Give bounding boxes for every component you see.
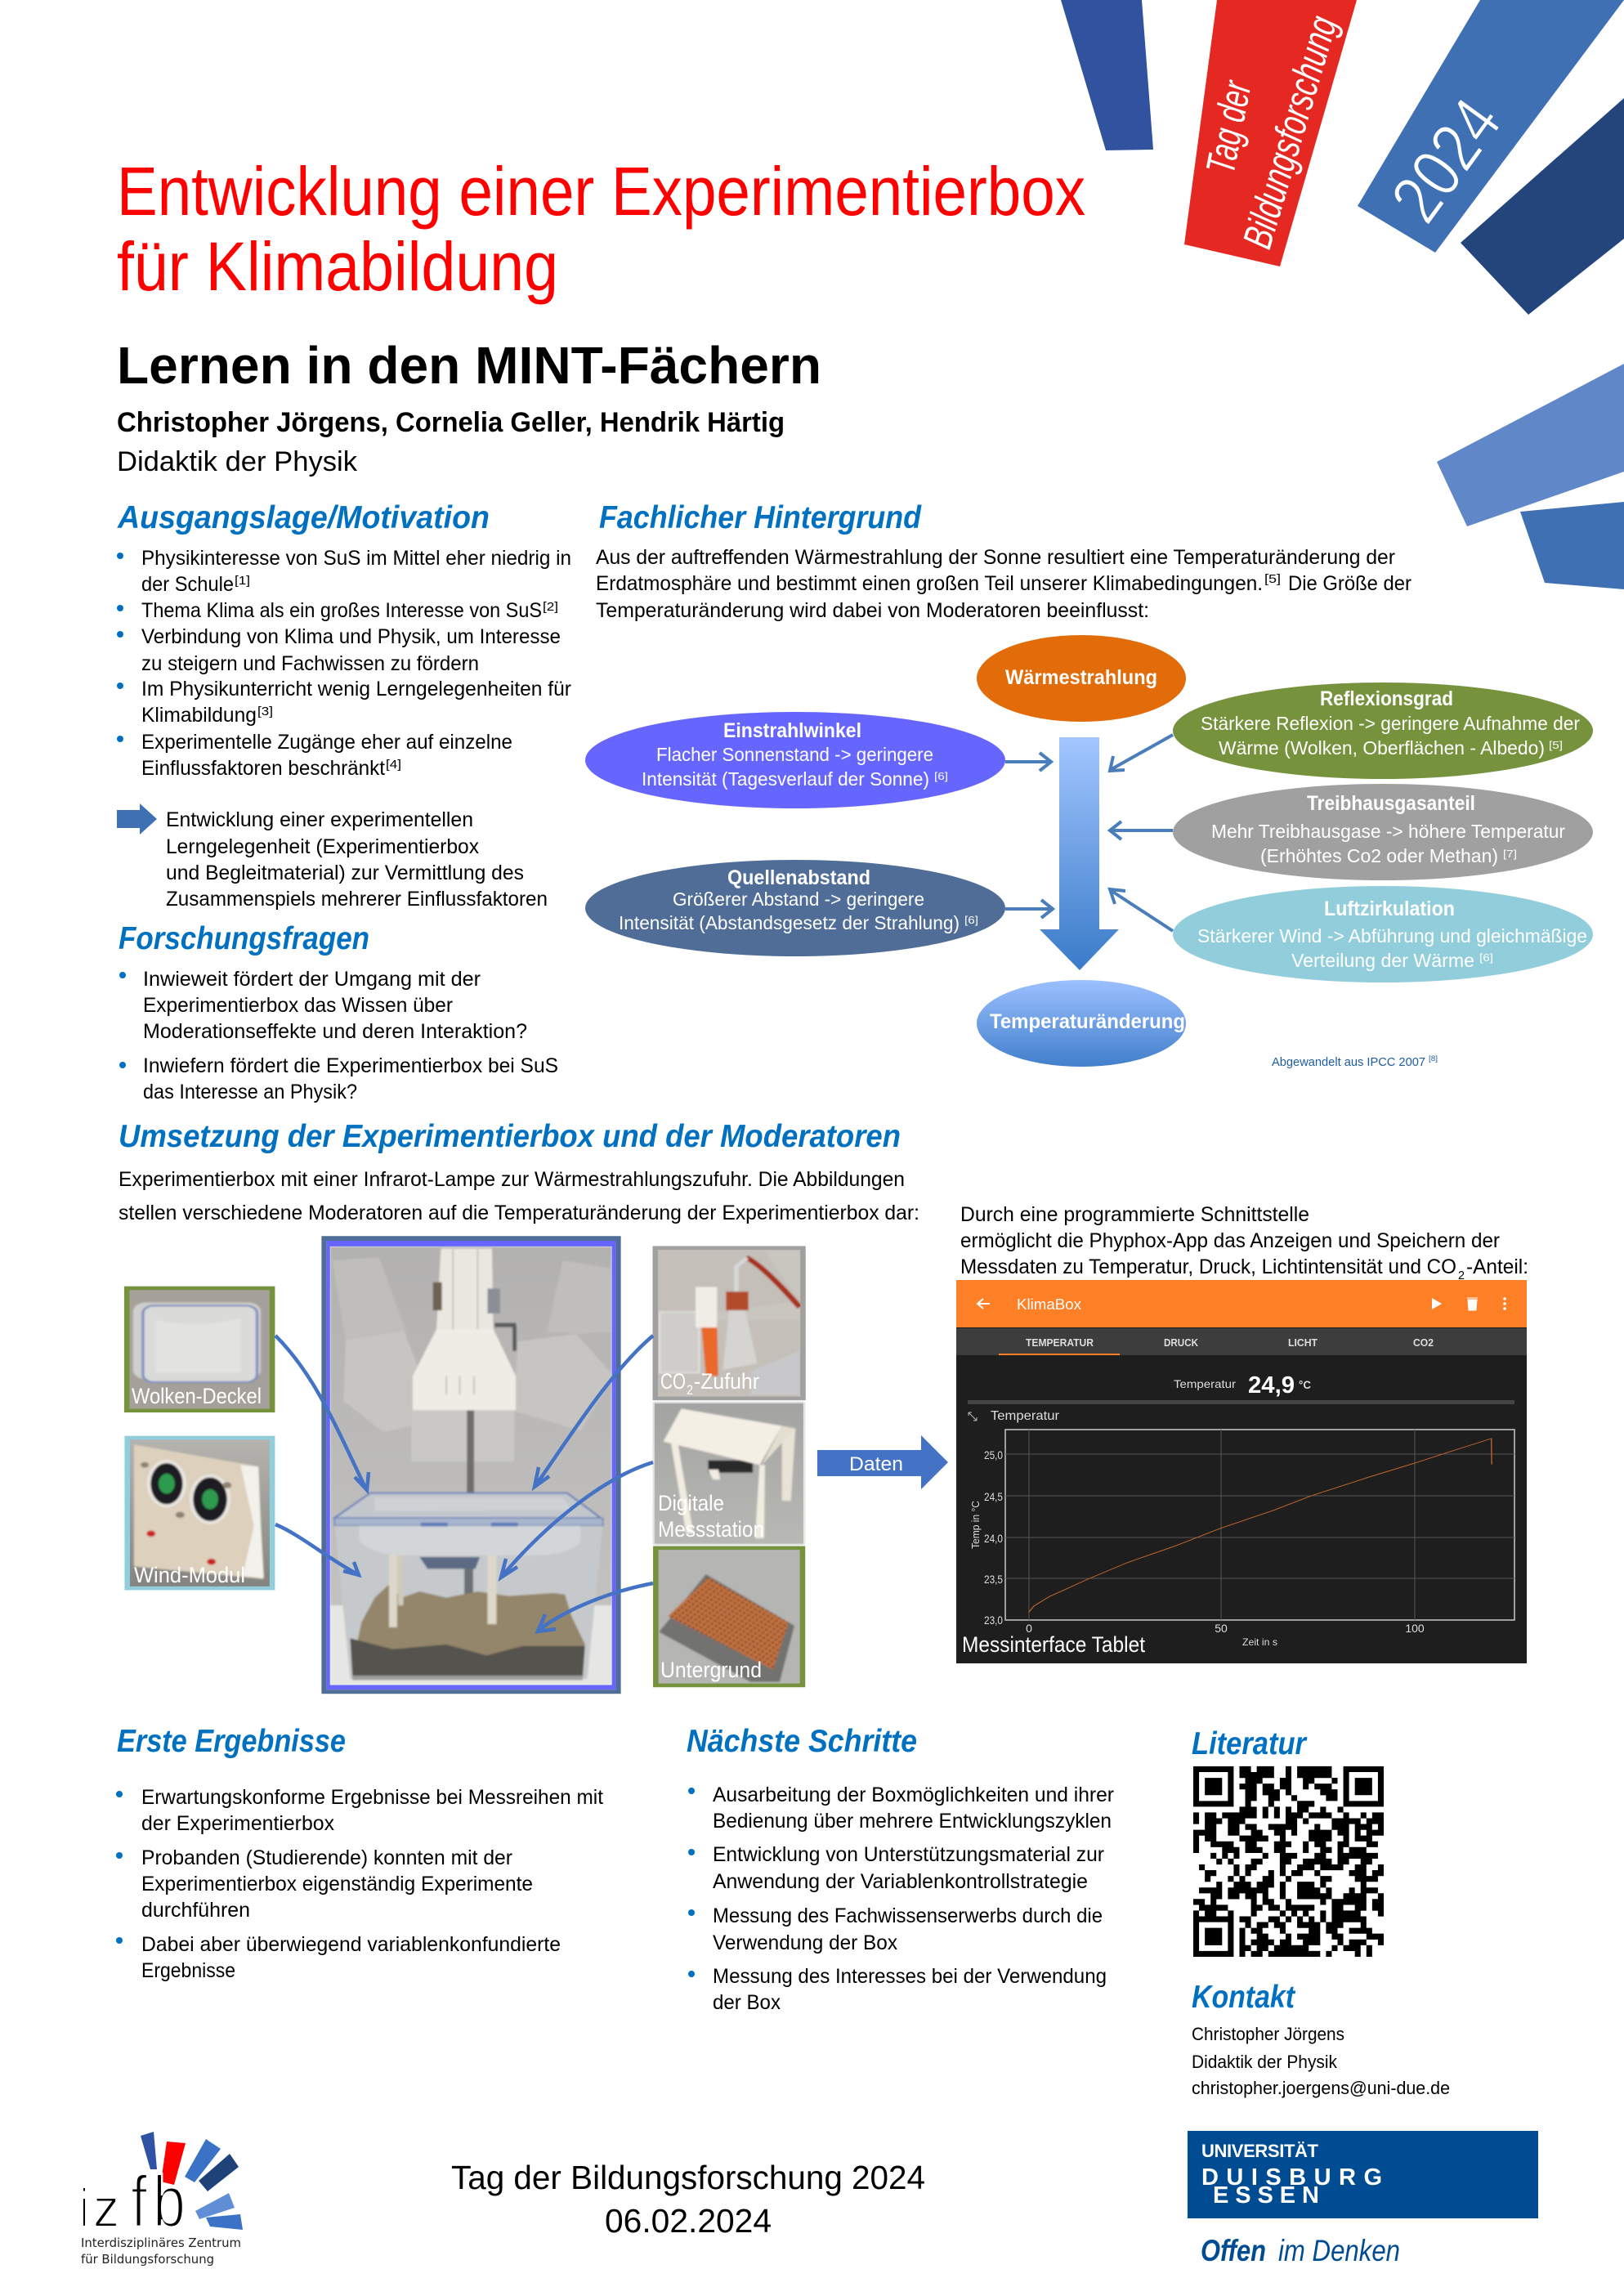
- node: Reflexionsgrad: [5]: [1549, 739, 1563, 751]
- panel: Fachlicher Hintergrund: [5]: [1264, 572, 1281, 586]
- title: [117, 153, 1085, 305]
- contact details: Christopher Jörgens: [1192, 2024, 1344, 2044]
- panel: Ausgangslage/Motivation: Experimentelle Zugänge eher auf einzelne: [141, 731, 512, 754]
- panel: Ausgangslage/Motivation: Verbindung von Klima und Physik, um Interesse: [141, 625, 561, 648]
- temperature reading: Temperatur: [1174, 1377, 1236, 1390]
- panel: Ausgangslage/Motivation: [1]: [235, 574, 250, 588]
- text block: interface description: Messdaten zu Temperatur, Druck, Lichtintensität und CO: [960, 1255, 1456, 1278]
- panel: Fachlicher Hintergrund: Temperaturänderung wird dabei von Moderatoren beeinflusst:: [596, 599, 1149, 622]
- source note: Abgewandelt aus IPCC 2007: [1272, 1055, 1425, 1069]
- panel: Fachlicher Hintergrund: Aus der auftreffenden Wärmestrahlung der Sonne resultiert eine Temperaturänderung der: [596, 546, 1395, 569]
- panel: Nächste Schritte: Nächste Schritte: [687, 1724, 917, 1759]
- node: Quellenabstand: Intensität (Abstandsgesetz der Strahlung): [619, 912, 960, 933]
- node: Quellenabstand: [585, 860, 1005, 956]
- line chart: Zeit in s: [1242, 1636, 1277, 1648]
- text block: interface description: 2: [1458, 1269, 1465, 1282]
- panel: Forschungsfragen: [119, 921, 558, 1103]
- heading: Kontakt: Kontakt: [1192, 1980, 1296, 2015]
- line chart: 25,0: [984, 1448, 1003, 1461]
- panel: Ausgangslage/Motivation: Einflussfaktoren beschränkt: [141, 757, 385, 780]
- tab bar: [956, 1328, 1527, 1355]
- node: Quellenabstand: Größerer Abstand -> geringere: [673, 888, 924, 910]
- panel: Erste Ergebnisse: durchführen: [141, 1899, 250, 1922]
- line chart: Temp in °C: [969, 1501, 982, 1549]
- node: Einstrahlwinkel: [6]: [934, 770, 948, 782]
- arrows: moderators to flow: [1005, 735, 1173, 931]
- temperature reading: [968, 1372, 1514, 1404]
- panel: Fachlicher Hintergrund: Erdatmosphäre und bestimmt einen großen Teil unserer Klimabedingungen.: [596, 572, 1263, 595]
- affiliation: Didaktik der Physik: [117, 446, 358, 477]
- line chart: [969, 1409, 1514, 1648]
- panel: Ausgangslage/Motivation: [117, 500, 571, 780]
- photo: experiment box with lamp: [321, 1236, 621, 1694]
- line chart: 23,5: [984, 1573, 1003, 1586]
- line chart: 24,5: [984, 1490, 1003, 1503]
- contact details: christopher.joergens@uni-due.de: [1192, 2078, 1450, 2098]
- line chart: Temperatur: [991, 1409, 1060, 1423]
- panel: Fachlicher Hintergrund: [596, 500, 1411, 622]
- temperature reading: 24,9: [1248, 1372, 1295, 1399]
- photo: Wind-Modul: Wind-Modul: [134, 1563, 245, 1587]
- panel: Nächste Schritte: Anwendung der Variablenkontrollstrategie: [713, 1870, 1088, 1893]
- panel: Erste Ergebnisse: der Experimentierbox: [141, 1812, 334, 1835]
- node: Quellenabstand: [6]: [964, 914, 978, 926]
- panel: measuring interface tablet: [956, 1280, 1527, 1663]
- panel: Ausgangslage/Motivation: Thema Klima als ein großes Interesse von SuS: [141, 599, 542, 622]
- arrow: central flow: [1040, 737, 1119, 970]
- node: Temperaturänderung: Temperaturänderung: [990, 1010, 1185, 1033]
- logo: izfb: [81, 2132, 243, 2267]
- arrow: conclusion marker: [117, 803, 157, 835]
- node: Quellenabstand: Quellenabstand: [727, 866, 870, 889]
- panel: Forschungsfragen: das Interesse an Physik?: [143, 1081, 357, 1103]
- line chart: 50: [1215, 1622, 1228, 1635]
- logo: izfb: f: [131, 2160, 147, 2242]
- logo: Universität Duisburg-Essen: [1188, 2131, 1538, 2267]
- photo: Untergrund: Untergrund: [660, 1658, 762, 1682]
- text block: Entwicklung: Zusammenspiels mehrerer Einflussfaktoren: [166, 888, 548, 911]
- panel: Erste Ergebnisse: Erste Ergebnisse: [117, 1724, 346, 1759]
- panel: Ausgangslage/Motivation: der Schule: [141, 573, 234, 596]
- arrow: Daten: [817, 1435, 948, 1489]
- panel: Erste Ergebnisse: Ergebnisse: [141, 1959, 235, 1982]
- node: Treibhausgasanteil: (Erhöhtes Co2 oder Methan): [1260, 845, 1498, 866]
- node: Treibhausgasanteil: [7]: [1503, 848, 1517, 860]
- arrow: Daten: Daten: [849, 1453, 903, 1475]
- panel: Ausgangslage/Motivation: [4]: [386, 758, 401, 772]
- node: Wärmestrahlung: Wärmestrahlung: [1005, 666, 1157, 689]
- line chart: 24,0: [984, 1532, 1003, 1545]
- node: Luftzirkulation: Verteilung der Wärme: [1291, 950, 1474, 971]
- footer: event and date: 06.02.2024: [605, 2202, 772, 2240]
- arrows: photos to box: [275, 1336, 653, 1631]
- panel: Forschungsfragen: Experimentierbox das Wissen über: [143, 994, 453, 1017]
- text block: Entwicklung: Entwicklung einer experimentellen: [166, 808, 473, 831]
- heading: Literatur: Literatur: [1192, 1726, 1308, 1761]
- footer: event and date: Tag der Bildungsforschung 2024: [451, 2159, 925, 2196]
- text block: interface description: Durch eine programmierte Schnittstelle: [960, 1203, 1309, 1226]
- node: Temperaturänderung: [977, 980, 1186, 1067]
- panel: Ausgangslage/Motivation: Physikinteresse von SuS im Mittel eher niedrig in: [141, 547, 571, 570]
- node: Reflexionsgrad: Stärkere Reflexion -> geringere Aufnahme der: [1201, 713, 1580, 734]
- tab bar: DRUCK: [1164, 1336, 1199, 1349]
- panel: Erste Ergebnisse: Dabei aber überwiegend variablenkonfundierte: [141, 1933, 561, 1956]
- node: Einstrahlwinkel: Flacher Sonnenstand -> geringere: [656, 744, 933, 765]
- node: Treibhausgasanteil: Treibhausgasanteil: [1307, 792, 1475, 815]
- panel: Nächste Schritte: Verwendung der Box: [713, 1931, 897, 1954]
- node: Treibhausgasanteil: Mehr Treibhausgase -> höhere Temperatur: [1211, 821, 1565, 842]
- node: Luftzirkulation: Luftzirkulation: [1324, 897, 1455, 920]
- app header: KlimaBox: [1017, 1296, 1081, 1313]
- heading: Umsetzung: Umsetzung der Experimentierbox und der Moderatoren: [119, 1119, 901, 1154]
- photo: CO2-Zufuhr: 2: [687, 1382, 693, 1398]
- footer: event and date: [451, 2159, 925, 2240]
- tab bar: TEMPERATUR: [1026, 1336, 1094, 1349]
- panel: Ausgangslage/Motivation: zu steigern und Fachwissen zu fördern: [141, 652, 479, 675]
- logo: Universität Duisburg-Essen: im Denken: [1278, 2234, 1400, 2267]
- logo: izfb: b: [153, 2160, 186, 2242]
- panel: Nächste Schritte: Ausarbeitung der Boxmöglichkeiten und ihrer: [713, 1784, 1114, 1806]
- node: Einstrahlwinkel: [585, 712, 1005, 808]
- node: Treibhausgasanteil: [1173, 784, 1593, 880]
- text block: Entwicklung: [166, 808, 548, 911]
- node: Einstrahlwinkel: Einstrahlwinkel: [723, 719, 861, 742]
- decorative header rays with event label: [1061, 0, 1624, 589]
- photo: Wolken-Deckel: [127, 1288, 272, 1411]
- text block: interface description: [960, 1203, 1528, 1282]
- panel: Forschungsfragen: Inwieweit fördert der Umgang mit der: [143, 968, 481, 991]
- panel: Nächste Schritte: Messung des Interesses bei der Verwendung: [713, 1965, 1107, 1988]
- node: Einstrahlwinkel: Intensität (Tagesverlauf der Sonne): [642, 768, 929, 790]
- text block: box description: stellen verschiedene Moderatoren auf die Temperaturänderung der Experimentierbox dar:: [119, 1202, 919, 1224]
- panel: Nächste Schritte: Entwicklung von Unterstützungsmaterial zur: [713, 1843, 1104, 1866]
- panel: Erste Ergebnisse: Probanden (Studierende) konnten mit der: [141, 1846, 512, 1869]
- photo: Digitale Messstation: Messstation: [658, 1517, 764, 1542]
- text block: interface description: -Anteil:: [1466, 1255, 1528, 1278]
- contact details: Didaktik der Physik: [1192, 2052, 1338, 2072]
- panel: Erste Ergebnisse: [116, 1724, 603, 1982]
- panel: Ausgangslage/Motivation: [3]: [257, 705, 273, 718]
- title: für Klimabildung: [117, 228, 558, 305]
- panel: Erste Ergebnisse: Experimentierbox eigenständig Experimente: [141, 1873, 533, 1895]
- photo: Wolken-Deckel: Wolken-Deckel: [132, 1384, 262, 1408]
- panel: Forschungsfragen: Forschungsfragen: [119, 921, 369, 956]
- panel: Forschungsfragen: Inwiefern fördert die Experimentierbox bei SuS: [143, 1054, 558, 1077]
- logo: izfb: z: [93, 2177, 119, 2238]
- photo: CO2-Zufuhr: CO: [660, 1369, 686, 1394]
- panel: Nächste Schritte: der Box: [713, 1991, 781, 2014]
- node: Luftzirkulation: [6]: [1479, 951, 1493, 964]
- panel: Erste Ergebnisse: Erwartungskonforme Ergebnisse bei Messreihen mit: [141, 1786, 603, 1809]
- node: Reflexionsgrad: Reflexionsgrad: [1320, 687, 1453, 710]
- tab bar: CO2: [1413, 1336, 1434, 1349]
- panel: Ausgangslage/Motivation: Ausgangslage/Motivation: [117, 500, 490, 535]
- QR code: [1193, 1766, 1384, 1957]
- contact details: [1192, 2024, 1450, 2098]
- text block: interface description: ermöglicht die Phyphox-App das Anzeigen und Speichern der: [960, 1229, 1500, 1252]
- source note: [8]: [1429, 1054, 1438, 1063]
- logo: izfb: i: [81, 2177, 87, 2238]
- photo: Digitale Messstation: Digitale: [658, 1491, 724, 1515]
- photo: CO2-Zufuhr: [655, 1248, 803, 1399]
- logo: izfb: Interdisziplinäres Zentrum: [81, 2236, 241, 2250]
- panel: Forschungsfragen: Moderationseffekte und deren Interaktion?: [143, 1020, 527, 1043]
- authors: Christopher Jörgens, Cornelia Geller, Hendrik Härtig: [117, 407, 785, 438]
- panel: Fachlicher Hintergrund: Die Größe der: [1288, 572, 1411, 595]
- panel: Fachlicher Hintergrund: Fachlicher Hintergrund: [599, 500, 922, 535]
- logo: Universität Duisburg-Essen: UNIVERSITÄT: [1201, 2141, 1319, 2161]
- tab bar: LICHT: [1288, 1336, 1318, 1349]
- text block: box description: [119, 1168, 919, 1224]
- photo: Wind-Modul: [128, 1438, 272, 1588]
- node: Reflexionsgrad: [1173, 683, 1593, 779]
- panel: Ausgangslage/Motivation: Im Physikunterricht wenig Lerngelegenheiten für: [141, 678, 571, 700]
- line chart: 100: [1405, 1622, 1425, 1635]
- temperature reading: °C: [1299, 1378, 1311, 1391]
- panel: Ausgangslage/Motivation: [2]: [543, 600, 558, 614]
- chart: moderator diagram: [585, 635, 1593, 1069]
- logo: Universität Duisburg-Essen: ESSEN: [1213, 2182, 1319, 2209]
- photo: Digitale Messstation: [654, 1403, 804, 1545]
- panel: Ausgangslage/Motivation: Klimabildung: [141, 704, 257, 727]
- panel: Nächste Schritte: [687, 1724, 1114, 2014]
- title: Entwicklung einer Experimentierbox: [117, 153, 1085, 230]
- line chart: 23,0: [984, 1613, 1003, 1627]
- logo: Universität Duisburg-Essen: DUISBURG: [1201, 2164, 1382, 2191]
- node: Reflexionsgrad: Wärme (Wolken, Oberflächen - Albedo): [1219, 737, 1545, 759]
- subtitle: Lernen in den MINT-Fächern: [117, 336, 821, 395]
- node: Wärmestrahlung: [977, 635, 1186, 722]
- panel: Nächste Schritte: Messung des Fachwissenserwerbs durch die: [713, 1904, 1103, 1927]
- photo: Untergrund: [655, 1548, 803, 1685]
- app header: [956, 1280, 1527, 1327]
- line chart: 0: [1026, 1622, 1032, 1635]
- logo: Universität Duisburg-Essen: Offen: [1201, 2234, 1266, 2267]
- panel: Nächste Schritte: Bedienung über mehrere Entwicklungszyklen: [713, 1810, 1112, 1833]
- decorative header rays with event label: Tag der: [1197, 76, 1260, 177]
- photo: CO2-Zufuhr: -Zufuhr: [694, 1369, 759, 1394]
- logo: izfb: für Bildungsforschung: [81, 2252, 214, 2267]
- text block: Entwicklung: Lerngelegenheit (Experimentierbox: [166, 835, 479, 858]
- node: Luftzirkulation: [1173, 886, 1593, 982]
- text block: Entwicklung: und Begleitmaterial) zur Vermittlung des: [166, 862, 524, 884]
- node: Luftzirkulation: Stärkerer Wind -> Abführung und gleichmäßige: [1197, 925, 1587, 947]
- text block: box description: Experimentierbox mit einer Infrarot-Lampe zur Wärmestrahlungszufuhr. Die Abbildungen: [119, 1168, 905, 1191]
- decorative header rays with event label: 2024: [1376, 84, 1516, 236]
- caption: Messinterface Tablet: [962, 1632, 1145, 1657]
